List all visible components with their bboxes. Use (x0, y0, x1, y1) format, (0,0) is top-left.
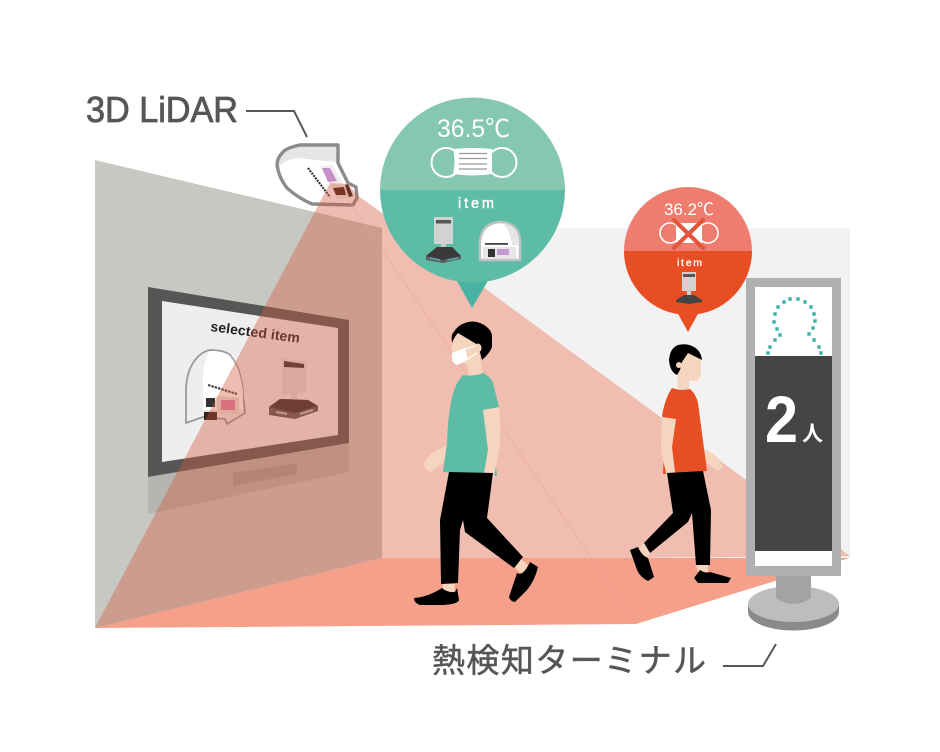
people count: 2 (765, 382, 798, 456)
person: unmasked walker (630, 344, 731, 583)
icon: LiDAR sensor device (277, 145, 357, 205)
item label: item (458, 196, 494, 212)
monitor stand item (269, 358, 318, 419)
back arm (424, 445, 447, 472)
monitor frame (148, 287, 349, 477)
bubble lower half (624, 251, 752, 315)
bubble pointer (677, 312, 699, 332)
monitor dome item (186, 350, 245, 424)
thermal detection terminal (746, 278, 841, 630)
back wall (382, 228, 850, 558)
wall monitor (148, 287, 349, 514)
icon: terminal stand (676, 272, 702, 304)
icon: dome gate (480, 222, 520, 260)
person: masked walker (414, 322, 538, 605)
monitor heading: selected item (210, 318, 301, 346)
monitor stand panel (148, 443, 349, 514)
terminal count panel (755, 356, 832, 551)
hair (452, 322, 492, 360)
monitor slot (233, 463, 297, 486)
ankles (442, 559, 528, 593)
terminal footer strip (755, 551, 832, 566)
icon: face mask (432, 148, 516, 177)
terminal leader line (723, 644, 776, 666)
terminal base (748, 586, 839, 630)
bubble upper half (380, 98, 565, 190)
bubble: unmasked visitor (624, 187, 752, 332)
left wall (95, 160, 382, 628)
bubble: masked visitor (380, 98, 565, 308)
item label: item (677, 257, 702, 269)
mask (452, 348, 468, 365)
terminal upper screen (755, 287, 832, 356)
3D LiDAR label: 3D LiDAR (86, 89, 238, 130)
neck and face (677, 353, 701, 390)
people unit: 人 (802, 423, 823, 446)
back arm (703, 448, 723, 471)
shirt (443, 373, 499, 476)
trousers (644, 471, 711, 565)
shirt (662, 388, 707, 474)
dotted person outline (768, 299, 821, 353)
temperature: 36.5℃ (437, 115, 510, 143)
LiDAR leader line (246, 111, 307, 137)
neck and face (452, 332, 483, 376)
temperature: 36.2℃ (664, 200, 714, 219)
bubble upper half (624, 187, 752, 251)
mask straps (465, 346, 477, 359)
floor (95, 558, 849, 628)
icon: terminal stand (426, 217, 461, 263)
bubble pointer (456, 279, 489, 308)
bubble lower half (380, 190, 565, 282)
sensor beam on left wall (95, 183, 382, 628)
front arm (661, 417, 678, 483)
icon: crossed out mask (660, 220, 718, 248)
sensor beam on back wall (382, 213, 850, 560)
terminal frame (746, 278, 841, 576)
monitor screen (162, 301, 338, 462)
beam fold line (345, 195, 636, 624)
trousers (440, 472, 523, 584)
terminal label: 熱検知ターミナル (432, 642, 706, 679)
ear (474, 344, 482, 352)
shoes (414, 562, 538, 605)
shoes (630, 547, 731, 583)
hair (669, 344, 702, 375)
terminal neck (776, 576, 811, 604)
ankles (638, 543, 708, 572)
ear (676, 362, 682, 368)
front arm (480, 407, 500, 486)
